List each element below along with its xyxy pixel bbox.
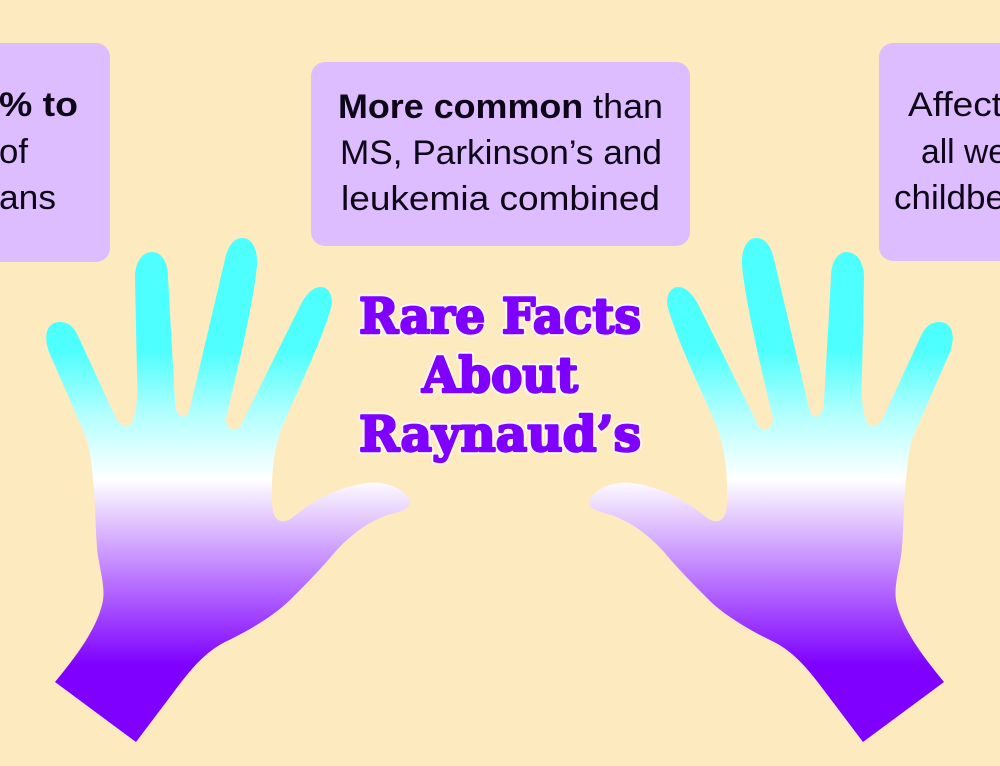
right box text: Affect	[908, 86, 1000, 124]
left box text: ans	[0, 179, 56, 217]
title: About	[421, 346, 578, 404]
title: Rare Facts	[359, 287, 641, 345]
title: About	[421, 346, 578, 404]
panel: right fact box	[879, 43, 1000, 261]
title: Raynaud’s	[359, 405, 641, 463]
left box text	[0, 86, 78, 217]
icon: left hand	[46, 238, 410, 742]
title: Rare Facts	[359, 287, 641, 345]
panel: left fact box	[0, 43, 110, 262]
panel: center fact box	[311, 62, 690, 246]
center box text: MS, Parkinson’s and	[340, 134, 662, 172]
icon: right hand	[589, 238, 953, 742]
center box text: More common than	[338, 88, 663, 126]
left box text: % to	[0, 86, 78, 124]
title: Raynaud’s	[359, 405, 641, 463]
center box text: leukemia combined	[341, 180, 660, 218]
right box text: childbe	[894, 179, 1000, 217]
title	[359, 287, 641, 463]
center box text	[338, 88, 663, 218]
right box text	[894, 86, 1000, 217]
